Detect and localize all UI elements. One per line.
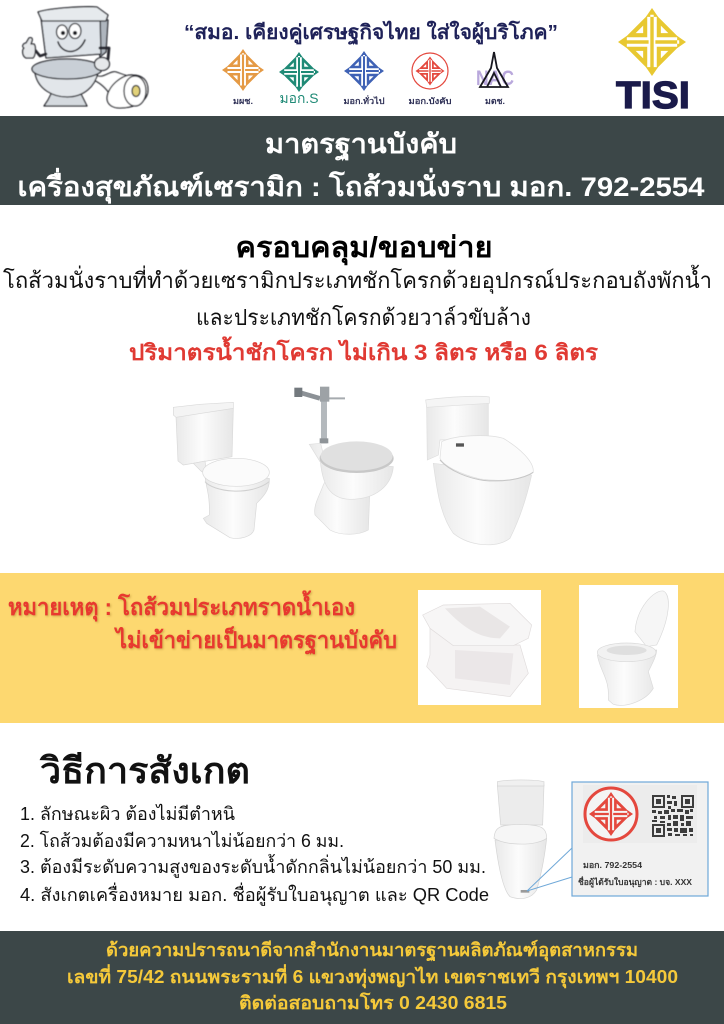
toilet photo: flush valve	[294, 387, 394, 534]
logo: มอก.ทั่วไป: มอก.ทั่วไป	[344, 94, 385, 106]
toilet photo: two-piece	[173, 402, 269, 538]
note text: ไม่เข้าข่ายเป็นมาตรฐานบังคับ	[113, 625, 397, 655]
checklist: 2. โถส้วมต้องมีความหนาไม่น้อยกว่า 6 มม.	[20, 830, 344, 851]
scope text block	[3, 265, 712, 330]
scope text block: โถส้วมนั่งราบที่ทำด้วยเซรามิกประเภทชักโครกด้วยอุปกรณ์ประกอบถังพักน้ำ	[3, 265, 712, 294]
note text: หมายเหตุ : โถส้วมประเภทราดน้ำเอง	[8, 590, 355, 622]
footer text: ด้วยความปรารถนาดีจากสำนักงานมาตรฐานผลิตภัณฑ์อุตสาหกรรม	[106, 939, 638, 962]
slogan: “สมอ. เคียงคู่เศรษฐกิจไทย ใส่ใจผู้บริโภค”	[184, 20, 558, 46]
mascot: smiling toilet with paper roll	[23, 7, 148, 108]
logo: มผช.	[222, 49, 264, 106]
footer text: เลขที่ 75/42 ถนนพระรามที่ 6 แขวงทุ่งพญาไท เขตราชเทวี กรุงเทพฯ 10400	[67, 964, 678, 989]
logo: มอก.บังคับ	[408, 53, 452, 106]
note text	[8, 590, 397, 655]
checklist: 1. ลักษณะผิว ต้องไม่มีตำหนิ	[20, 803, 235, 824]
callout: label example	[527, 782, 708, 896]
footer text: ติดต่อสอบถามโทร 0 2430 6815	[239, 992, 507, 1013]
logo: มตช.	[476, 52, 514, 106]
checklist	[20, 803, 489, 906]
logo: มผช.: มผช.	[233, 96, 253, 106]
heading: scope: ครอบคลุม/ขอบข่าย	[236, 232, 492, 265]
logo: มอก.S: มอก.S	[280, 90, 318, 106]
footer band	[0, 931, 724, 1024]
logo: มตช.: มตช.	[485, 96, 505, 106]
callout: QR code	[652, 795, 693, 836]
scope text block: และประเภทชักโครกด้วยวาล์วขับล้าง	[196, 305, 531, 330]
photo: pour-flush toilet	[579, 585, 678, 708]
callout: TISI mandatory mark	[585, 788, 637, 840]
logo: มอก.S	[279, 52, 319, 106]
scope flush volume: ปริมาตรน้ำชักโครก ไม่เกิน 3 ลิตร หรือ 6 ลิตร	[129, 336, 598, 365]
mascot: toilet paper sheet and roll	[94, 72, 130, 98]
logo: มอก.ทั่วไป	[344, 51, 385, 106]
header band	[0, 116, 724, 205]
logo: มตช.: NAC	[476, 67, 514, 90]
logo: มอก.บังคับ: มอก.บังคับ	[408, 96, 452, 106]
heading: how to observe: วิธีการสังเกต	[39, 750, 250, 791]
checklist: 4. สังเกตเครื่องหมาย มอก. ชื่อผู้รับใบอนุญาต และ QR Code	[20, 882, 489, 906]
logo: TISI	[616, 8, 690, 117]
toilet photo: label location	[494, 780, 547, 899]
callout: licensee: ชื่อผู้ได้รับใบอนุญาต : บจ. XXX	[578, 875, 692, 888]
callout: standard number: มอก. 792-2554	[583, 860, 642, 870]
checklist: 3. ต้องมีระดับความสูงของระดับน้ำดักกลิ่นไม่น้อยกว่า 50 มม.	[20, 854, 486, 878]
header title line 1: มาตรฐานบังคับ	[265, 129, 457, 162]
header title line 2: เครื่องสุขภัณฑ์เซรามิก : โถส้วมนั่งราบ มอก. 792-2554	[18, 167, 704, 204]
logo: TISI: TISI	[616, 75, 690, 117]
photo: squat toilet	[418, 590, 541, 705]
toilet photo: one-piece with bidet seat	[426, 396, 533, 545]
footer text	[67, 939, 678, 1013]
note band	[0, 573, 724, 723]
